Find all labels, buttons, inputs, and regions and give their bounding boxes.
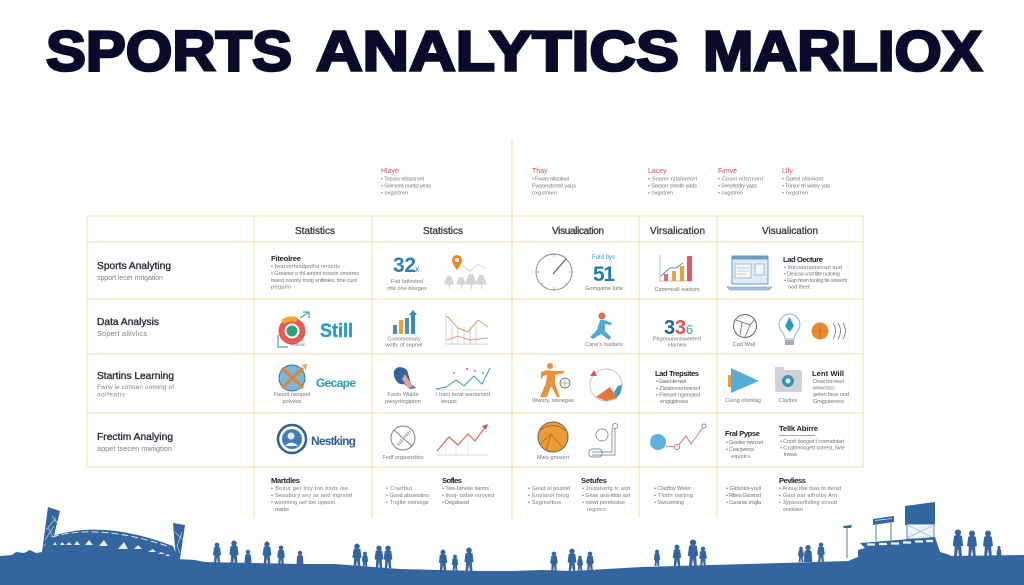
bottom cell: Pevliess: ervolsen	[783, 507, 803, 513]
icon: head profile	[385, 367, 421, 405]
column headers: Statistics	[295, 226, 335, 237]
chart: rising bars	[654, 255, 700, 293]
cell: Tellk Abirre text: Tellk Abirre	[779, 424, 818, 433]
row label: Startins Learning: oolfeatis	[97, 392, 125, 398]
stat: Nestking: Nestking	[311, 434, 356, 448]
cell: Lad Oecture text: • fidrvsterasnerspl aud	[784, 265, 842, 271]
cell: 32x stat: Fiat fatlovtod	[391, 279, 423, 285]
stat: 336: 3	[675, 317, 686, 339]
icon: donut: Petinon	[290, 342, 306, 347]
bottom cell: Setufes	[581, 476, 630, 513]
top annotation: Fimve: • oxgstren	[718, 190, 743, 196]
icon: pin and crowd	[444, 255, 487, 289]
row label: Frectim Analying	[97, 432, 173, 453]
cell: Fiteolree text: • Greansr o thl amont tosson smetres	[271, 271, 359, 277]
cell: Fral Pypse text: easpirs	[731, 454, 750, 460]
top annotation: Thay	[532, 168, 576, 196]
chart: ball and line	[650, 424, 706, 450]
bottom cell: list 2	[528, 486, 570, 506]
bottom cell: Setufes: • Gase asa-tdop asf	[582, 493, 630, 499]
top annotation: Fimve: • Seeyrtodry yaas	[718, 184, 757, 190]
bottom cell: list 4: • Ribes Gscersd	[726, 493, 761, 499]
chart: line with columns	[446, 313, 488, 344]
cell: Lad Oecture text: ood thed.	[788, 284, 811, 290]
matrix grid	[87, 140, 863, 518]
title: SPORTS	[46, 20, 292, 84]
top annotation: Lacey	[648, 168, 697, 196]
stat: Gecape: Gecape	[316, 376, 356, 390]
top annotation: Hlaye: • oxgsrtren	[381, 190, 408, 196]
icon: head profile: pwsymngipton	[385, 399, 421, 405]
top annotation: Llfy: • Gaest nitsmont	[782, 176, 823, 182]
icon: orange ball	[537, 422, 570, 461]
bottom cell: list 3: • Tlotm oarting	[654, 493, 693, 499]
cell: Lad Trepsites text: • Zistshsoermarsof	[656, 386, 700, 392]
icon: gauge	[536, 254, 572, 290]
bottom cell: Sofles: • Degstsesd	[442, 500, 469, 506]
top annotation: Hlaye	[381, 168, 431, 196]
icon: orange runner with ball: Wwury, wsoegas	[532, 398, 574, 404]
top annotation: Lacey: • Sarsorr shedh yads	[648, 184, 697, 190]
bottom cell: Martdles: • Seoubury sey ss and mgrsod	[271, 493, 352, 499]
stat: 51: Gomgame lutle	[585, 286, 623, 292]
row label: Frectim Analying: Frectim Analying	[97, 432, 173, 443]
bottom cell: Martdles: • wsoming oef toe oppost	[271, 500, 335, 506]
row label: Sports Analyting	[97, 261, 171, 282]
cell: Fral Pypse text: • Gseitre nwnset	[726, 440, 763, 446]
cell: Fiteolree text: pegpllo	[271, 284, 291, 290]
bottom cell: list 4: • Gldsolot-vrell	[726, 486, 761, 492]
top annotation: Lacey: • Sosrer nitsloreort	[648, 176, 697, 182]
icon: head profile: Fanin Wujde	[387, 392, 419, 398]
icons: ball, bulb, basketball, waves: Cad Wall	[733, 342, 755, 348]
cell: 32x stat: 32	[393, 254, 416, 277]
top annotation: Hlaye: • Sorrsont nuetsl yeas	[381, 184, 431, 190]
cell: Fiteolree text: treest ooonty msig snittoles, ttne cuot	[271, 278, 357, 284]
top annotation: Llfy	[782, 168, 831, 196]
bottom cell: Setufes: Setufes	[581, 476, 607, 485]
icons: ball, bulb, basketball, waves	[733, 314, 846, 348]
cell: Lent Will text	[812, 369, 849, 405]
scoreboard and stand	[843, 502, 950, 560]
column headers	[295, 226, 818, 237]
bottom cell: Sofles	[442, 476, 494, 506]
cell: Lent Will text: wtwrrtsc	[812, 386, 835, 392]
top annotation: Thay: • Fowrs nitsoloot	[532, 176, 569, 182]
cell: Lad Oecture text: • Gap hosn tonlog tte sowent	[784, 278, 847, 284]
bottom cell: Sofles: • tlooj- tsdse rsroyed	[442, 493, 494, 499]
bottom cell: Sofles: Sofles	[442, 476, 462, 485]
cell: Lad Trepsites text: • Gass Hemsel	[656, 379, 686, 385]
cell: Fiteolree text: Fiteolree	[271, 254, 301, 263]
chart: dotted line chart: wsuos	[440, 399, 457, 405]
row label: Startins Learning: Startins Learning	[97, 371, 174, 382]
bottom cell: list 2: • Eoslarol lolog	[528, 493, 569, 499]
icon: orange runner with ball	[532, 363, 574, 404]
top annotation: Fimve: Fimve	[718, 168, 737, 175]
stat: 336: 3	[664, 317, 675, 339]
bottom cell: list 3: • Cladfoy Wwer	[654, 486, 691, 492]
title: MARLIOX	[703, 20, 982, 84]
row label: Data Analysis: Data Analysis	[97, 317, 159, 328]
cell: Tellk Abirre text: tnews	[784, 452, 797, 458]
cell: Lad Trepsites text: • Fienset ngenaled	[656, 392, 700, 398]
cell: Tellk Abirre text	[779, 424, 845, 458]
spectators right	[550, 529, 1001, 571]
cell: Lent Will text: Dswrteroeet	[813, 379, 844, 385]
cell: Lad Oecture text: • Descsa cost title nutorng	[784, 272, 840, 278]
title: ANALYTICS	[316, 20, 679, 84]
bottom cell: list 3	[654, 486, 693, 506]
top annotation: Thay: oxgstmen	[532, 190, 557, 196]
icon: blue triangle: Ceing obimlag	[725, 398, 761, 404]
cell: 32x stat	[387, 254, 427, 292]
icon: crossed circle: Fodf orgasnsites	[382, 455, 424, 461]
top annotation: Llfy: Llfy	[782, 168, 793, 175]
row label: Data Analysis	[97, 317, 159, 338]
cell: Fral Pypse text	[725, 429, 763, 460]
bottom cell: Martdles: • Bosut ger ltsy ton hsds lse	[271, 486, 348, 492]
icon: blue triangle	[725, 368, 761, 404]
cell: Lent Will text: geten fane ond	[813, 392, 849, 398]
top annotation: Fimve: • Cosnt nilsrmont	[718, 176, 763, 182]
cell: Lent Will text: Gmgpirereea	[813, 399, 845, 405]
column headers: Visualication	[762, 226, 818, 237]
top annotation: Hlaye: • Tesors nitssorset	[381, 176, 424, 182]
cell: Lent Will text: Lent Will	[812, 369, 844, 378]
icon: laptop	[727, 256, 772, 290]
bottom cell: Pevliess: • Gaol par alfroiby Ant	[779, 493, 837, 499]
cell: Fral Pypse text: Fral Pypse	[725, 429, 760, 438]
row label: Startins Learning: Fwrw le cimoen ooming of	[97, 384, 174, 391]
bottom cell: Martdles	[271, 476, 352, 513]
top annotation: Lacey: Lacey	[648, 168, 667, 175]
icon: camera	[775, 367, 802, 404]
cell: Fral Pypse text: • Ceacjveros	[726, 447, 754, 453]
icon: pipe gauge	[589, 424, 618, 457]
chart: blue bars with arrow: Conomorcuty	[387, 336, 421, 342]
chart: blue bars with arrow	[384, 310, 423, 348]
cell: 32x stat: x	[415, 264, 420, 274]
bottom cell: Setufes: • osiwt peretsslse	[582, 500, 625, 506]
cell: Tellk Abirre text: • Cxaftemogett sotrest, fwte	[780, 446, 845, 452]
bottom cell: list	[386, 486, 429, 506]
bottom cell: Pevliess	[779, 476, 841, 513]
cell: Lad Oecture text: Lad Oecture	[783, 255, 823, 264]
bottom cell: Pevliess: • 3ypsooofisfing snood	[779, 500, 837, 506]
cell: Lad Trepsites text	[655, 369, 700, 405]
stat: 336	[653, 317, 701, 348]
cell: Fiteolree text: • fwarvertesdpotfol rinosrts	[271, 264, 340, 270]
stat: Still: Still	[320, 321, 353, 342]
cell: Lad Oecture text	[783, 255, 847, 290]
cell: Fiteolree text	[271, 254, 359, 290]
bottom cell: Setufes: • Jrussosrtg tc asd	[582, 486, 630, 492]
cell: 32x stat: cite one blorges	[387, 286, 427, 292]
icon: camera: Clarltes	[779, 398, 798, 404]
bottom cell: list 2: • Gead ol posiod	[528, 486, 570, 492]
bottom cell: list 2: • Ssgmelbus	[528, 500, 561, 506]
top annotation: Fimve	[718, 168, 763, 196]
top annotation: Thay: Thay	[532, 168, 548, 175]
row label: Data Analysis: Sopert allivlics	[97, 329, 147, 338]
icon: globe with orange cross: polvess	[283, 399, 302, 405]
top annotation: Llfy: • Torsor th wetry yda	[782, 184, 831, 190]
cell: Lad Trepsites text: engigpiroea	[660, 399, 689, 405]
bottom cell: list: • Crarlbut	[386, 486, 412, 492]
stat: 336: Pkgonumnoweeted	[653, 336, 701, 342]
column headers: Visualication	[552, 226, 604, 237]
stat: 51	[585, 255, 623, 292]
bottom cell: Sofles: • Tew-tanelw lsems	[442, 486, 489, 492]
stat: 336: Hamea	[668, 342, 687, 348]
icon: circle with peaks	[590, 369, 622, 401]
icon: orange ball: Mwu-gnosert	[537, 455, 570, 461]
bottom cell: list 4	[726, 486, 762, 506]
chart: red trend line	[437, 424, 488, 455]
chart: dotted line chart	[436, 368, 490, 405]
column headers: Virsalication	[650, 226, 705, 237]
cell: Lad Trepsites text: Lad Trepsites	[655, 369, 699, 378]
bottom cell: list 4: • Cuosnsc rrogla	[726, 500, 762, 506]
row label: Frectim Analying: appet tsecen mwiigtion	[97, 444, 172, 453]
icon: globe with orange cross: Fauoit nwoped	[274, 392, 310, 398]
cell: Tellk Abirre text: • Cood: tlongwt t conrodntart	[780, 439, 844, 445]
icon: blue runner	[585, 312, 623, 348]
stat: 51: 51	[593, 263, 615, 286]
bottom cell: list: • Good alsoeistins	[386, 493, 429, 499]
bottom cell: Martdles: Martdles	[271, 476, 300, 485]
top annotation: Llfy: • oxgstren	[782, 190, 808, 196]
chart: blue bars with arrow: wotly of sepnet	[384, 342, 423, 348]
icon: donut	[278, 312, 309, 347]
row label: Startins Learning	[97, 371, 174, 398]
chart: dotted line chart: I hant lovat wartomed	[436, 392, 490, 398]
row label: Sports Analyting: Sports Analyting	[97, 261, 171, 272]
stadium	[42, 507, 185, 559]
bottom cell: Setufes: regsrcs	[587, 507, 606, 513]
icon: blue runner: Cane's Isatlaos	[585, 342, 623, 348]
top annotation: Lacey: • oxgstren	[648, 190, 673, 196]
spectators left	[213, 541, 474, 571]
icon: crossed circle	[382, 426, 424, 461]
stat: 51: Fold fiys	[592, 255, 615, 261]
title	[46, 20, 982, 84]
bottom cell: Pevliess: Pevliess	[779, 476, 806, 485]
icon: globe with orange cross	[274, 364, 310, 405]
bottom cell: list 3: • Swcosming	[654, 500, 684, 506]
bottom cell: Martdles: marks	[275, 507, 289, 513]
top annotation: Hlaye: Hlaye	[381, 168, 399, 175]
icon: blue badge	[278, 425, 306, 453]
row label: Sports Analyting: spport lecer mrigation	[97, 273, 163, 282]
skyline ground	[0, 550, 1024, 585]
stat: 336: 6	[686, 322, 693, 337]
bottom cell: list: • Tngite ownoige	[386, 500, 429, 506]
column headers: Statistics	[423, 226, 463, 237]
chart: rising bars: Cammeall wartom	[654, 287, 700, 293]
top annotation: Thay: Fwsonstontd yaus	[532, 184, 576, 190]
bottom cell: Pevliess: • Ansuy ltse toas to deost	[779, 486, 841, 492]
